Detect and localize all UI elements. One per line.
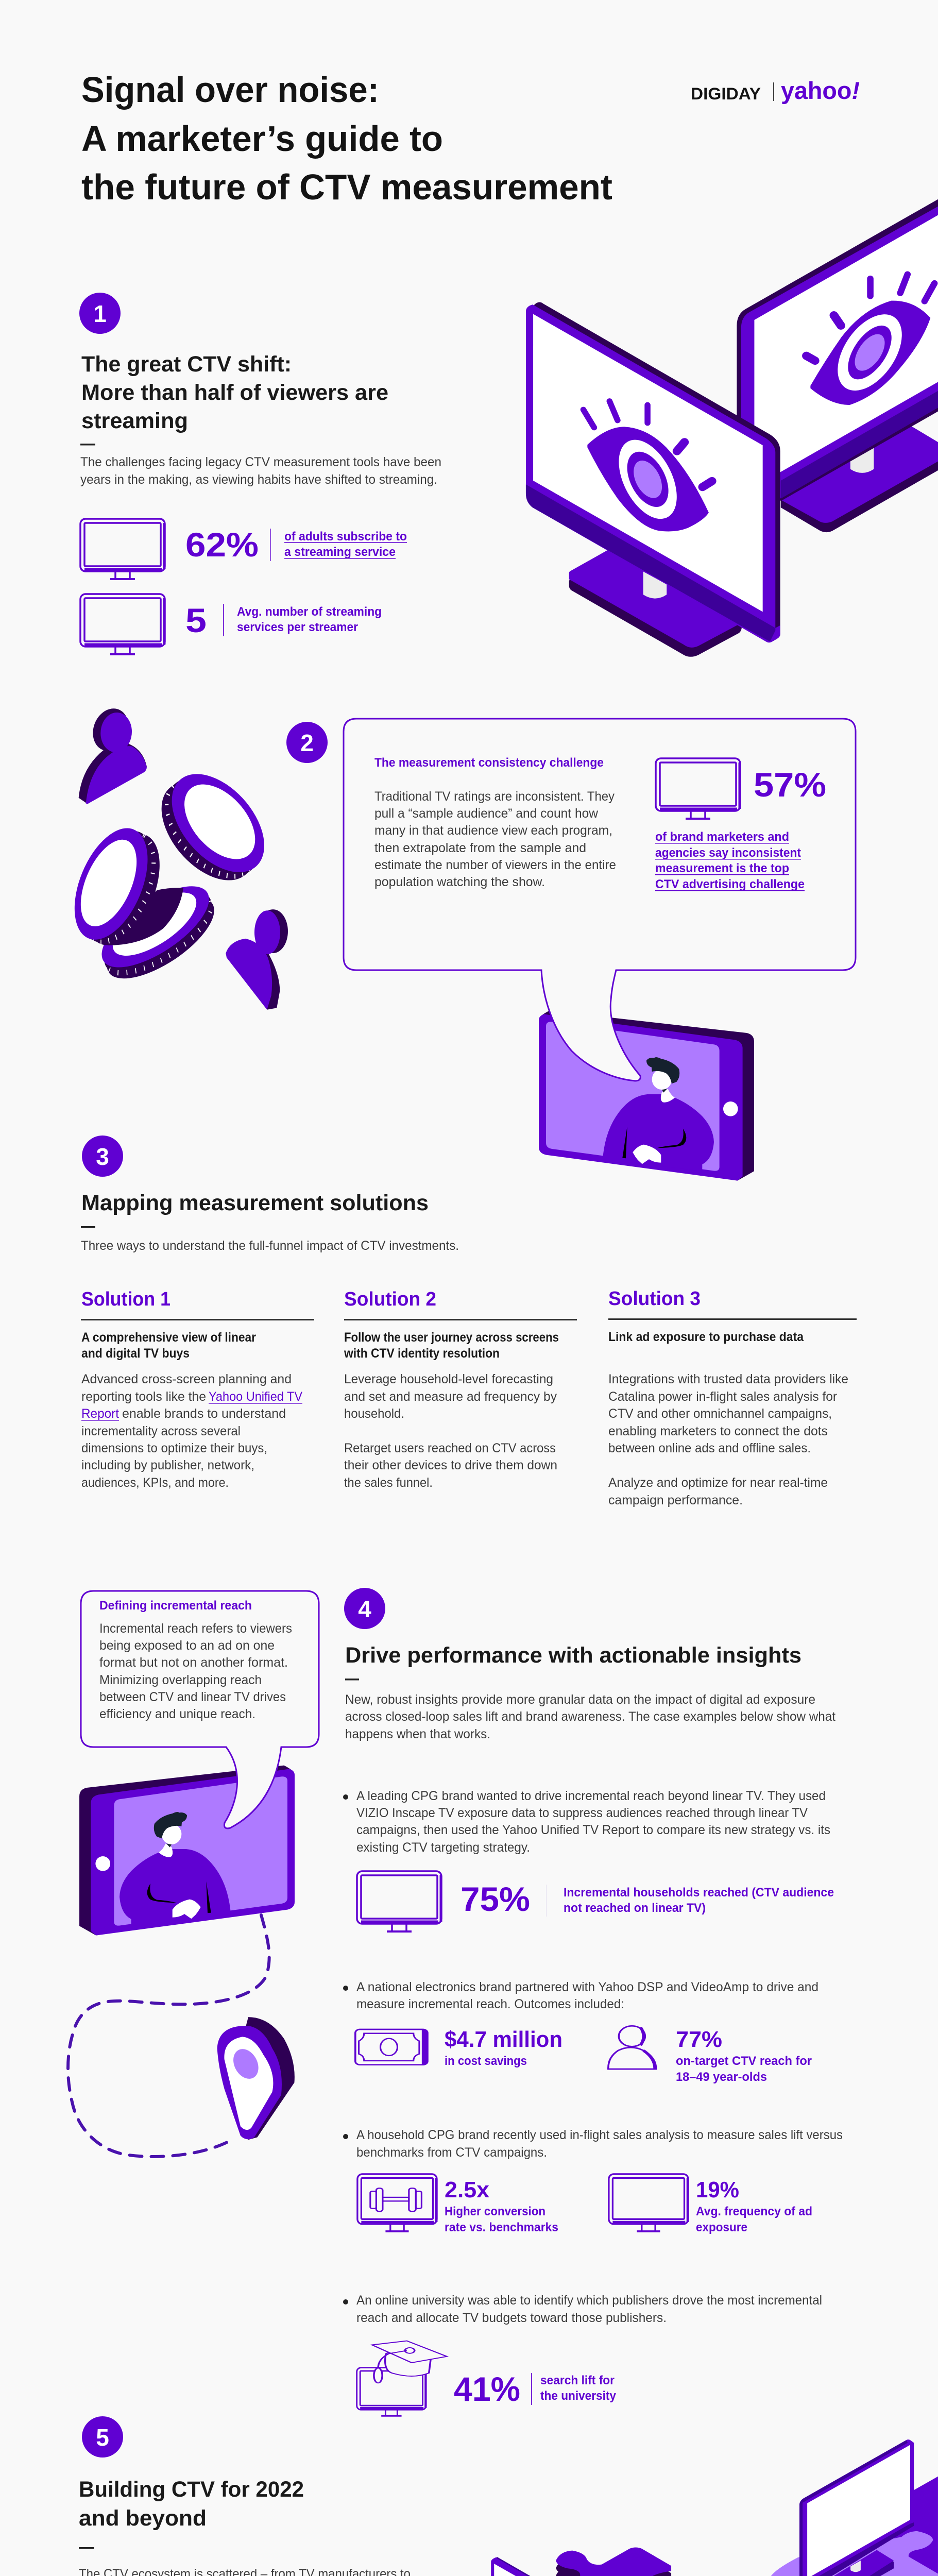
section 4 intro text: happens when that works.: [345, 1727, 490, 1741]
stat: 5 services: Avg. number of streaming: [237, 605, 382, 619]
section 1 intro text: The challenges facing legacy CTV measurement tools have been: [80, 455, 441, 469]
case example: household CPG brand: benchmarks from CTV campaigns.: [356, 2145, 547, 2160]
stat: 57 percent: of brand marketers and: [655, 830, 789, 844]
case example: electronics brand: in cost savings: [445, 2054, 527, 2068]
panel: solution 3: CTV and other omnichannel campaigns,: [608, 1406, 832, 1421]
section 3 heading: Mapping measurement solutions: [81, 1191, 429, 1215]
monitor right: [799, 2439, 914, 2576]
case example: electronics brand: [343, 1980, 818, 2084]
panel: solution 3: Link ad exposure to purchase data: [608, 1330, 804, 1344]
panel: solution 1: incrementality across several: [81, 1424, 241, 1438]
front monitor: [526, 302, 780, 657]
case example: electronics brand: on-target CTV reach for: [676, 2054, 812, 2068]
case example: online university: An online university was able to identify which publishers drove the most incremental: [356, 2293, 822, 2308]
icon: tv: [357, 1871, 441, 1931]
callout body: Traditional TV ratings are inconsistent. They: [374, 789, 615, 804]
panel: solution 2: the sales funnel.: [344, 1476, 433, 1490]
illustration: monitors with eyes: [526, 199, 938, 657]
case example: household CPG brand: 2.5x: [445, 2177, 490, 2202]
logos: Digiday and Yahoo: [691, 77, 860, 104]
section 1 intro text: years in the making, as viewing habits have shifted to streaming.: [80, 472, 437, 487]
stat: 62 percent: of adults subscribe to: [284, 530, 407, 544]
panel: measurement consistency callout: [344, 719, 856, 1081]
section 4 number badge: 4: [358, 1596, 371, 1622]
person bottom: [226, 909, 288, 1010]
case example: CPG brand: not reached on linear TV): [564, 1901, 706, 1915]
illustration: mirrored tablet with presenter: [79, 1766, 295, 1936]
stat: 57 percent: measurement is the top: [655, 861, 789, 875]
icon: tv with graduation cap: [357, 2341, 447, 2416]
panel: solution 2: Follow the user journey across screens: [344, 1330, 559, 1345]
illustration: coins and people: [60, 700, 288, 1010]
panel: solution 3: Catalina power in-flight sales analysis for: [608, 1389, 837, 1404]
stat: 5 services: 5: [185, 601, 207, 639]
stat: 62 percent: a streaming service: [284, 545, 396, 559]
section 1 heading: The great CTV shift:: [81, 352, 292, 377]
stat: 75 percent: 75%: [461, 1880, 530, 1918]
panel: defining incremental reach callout: Minimizing overlapping reach: [99, 1673, 262, 1687]
section 5 number badge: [82, 2416, 123, 2458]
panel: solution 2: their other devices to drive them down: [344, 1458, 557, 1472]
title: [81, 70, 612, 207]
icon: tv with dumbbell: [357, 2174, 437, 2231]
panel: solution 1: [81, 1289, 314, 1490]
icon: location pin: [217, 2017, 295, 2140]
panel: solution 1: including by publisher, network,: [81, 1458, 254, 1472]
section 4 intro text: New, robust insights provide more granular data on the impact of digital ad exposure: [345, 1692, 815, 1707]
icon: tv: [609, 2174, 688, 2231]
icon: tv: [80, 594, 165, 654]
section 1 number badge: [79, 293, 121, 334]
panel: solution 3: [608, 1288, 857, 1507]
panel: solution 3: Analyze and optimize for near real-time: [608, 1476, 828, 1490]
section 3 number badge: [82, 1136, 123, 1177]
case example: online university: search lift for: [540, 2374, 615, 2387]
speech bubble: [344, 719, 856, 1081]
person top: [79, 700, 147, 804]
section 4 intro text: [345, 1692, 835, 1741]
panel: defining incremental reach callout: being exposed to an ad on one: [99, 1638, 275, 1653]
section 3 heading: [81, 1191, 459, 1253]
panel: solution 2: Leverage household-level forecasting: [344, 1372, 553, 1386]
icon: banknote: [355, 2029, 428, 2065]
section 4 intro text: across closed-loop sales lift and brand awareness. The case examples below show what: [345, 1709, 835, 1724]
stat: 57 percent: CTV advertising challenge: [655, 877, 805, 891]
stat: 62 percent: 62%: [185, 526, 259, 564]
icon: tv: [656, 758, 740, 819]
panel: solution 2: Solution 2: [344, 1289, 436, 1310]
stat: 57 percent: 57%: [754, 766, 826, 804]
callout body: [374, 789, 616, 889]
title: A marketer’s guide to: [81, 118, 443, 159]
panel: defining incremental reach callout: efficiency and unique reach.: [99, 1707, 255, 1721]
section 1 heading: [80, 352, 388, 445]
section 2 number badge: 2: [300, 730, 314, 756]
illustration: tablet with presenter: [539, 1011, 754, 1181]
case example: CPG brand: Incremental households reached (CTV audience: [564, 1886, 834, 1900]
panel: solution 2: with CTV identity resolution: [344, 1346, 500, 1361]
case example: CPG brand: VIZIO Inscape TV exposure data to suppress audiences reached through linear TV: [356, 1806, 808, 1820]
panel: defining incremental reach callout: [81, 1591, 319, 1828]
section 2 number badge: [286, 722, 328, 763]
panel: solution 1: and digital TV buys: [81, 1346, 190, 1361]
stat: 62 percent: [80, 519, 407, 579]
panel: solution 3: Solution 3: [608, 1288, 701, 1310]
panel: solution 2: household.: [344, 1406, 404, 1421]
section 4 number badge: [344, 1588, 385, 1629]
panel: solution 2: Retarget users reached on CTV across: [344, 1441, 556, 1455]
case example: household CPG brand: 19%: [696, 2177, 739, 2202]
callout heading: The measurement consistency challenge: [374, 756, 604, 770]
section 3 heading: Three ways to understand the full-funnel impact of CTV investments.: [81, 1239, 459, 1253]
section 4 heading: [345, 1643, 801, 1681]
case example: online university: [343, 2293, 822, 2416]
case example: CPG brand: existing CTV targeting strategy.: [356, 1840, 530, 1855]
panel: defining incremental reach callout: between CTV and linear TV drives: [99, 1690, 286, 1704]
section 1 heading: streaming: [81, 409, 188, 433]
case example: online university: reach and allocate TV budgets toward those publishers.: [356, 2311, 667, 2325]
callout body: pull a “sample audience” and count how: [374, 806, 599, 821]
case example: electronics brand: $4.7 million: [445, 2027, 562, 2052]
case example: household CPG brand: A household CPG brand recently used in-flight sales analysis to measure sales lift versus: [356, 2128, 843, 2142]
icon: tv: [80, 519, 165, 579]
stat: 5 services: services per streamer: [237, 620, 358, 634]
panel: solution 2: [344, 1289, 577, 1490]
title: Signal over noise:: [81, 70, 379, 110]
section 1 number badge: 1: [93, 300, 107, 327]
title: the future of CTV measurement: [81, 167, 612, 207]
logos: Digiday and Yahoo: DIGIDAY: [691, 84, 761, 103]
coin top right: [148, 754, 278, 901]
case example: online university: 41%: [454, 2370, 520, 2408]
coin bottom: [94, 870, 223, 995]
section 4 heading: Drive performance with actionable insights: [345, 1643, 801, 1668]
section 5 number badge: 5: [96, 2424, 109, 2451]
panel: solution 1: enable brands to understand: [122, 1406, 286, 1421]
icon: person: [608, 2026, 656, 2069]
section 3 number badge: 3: [96, 1143, 109, 1170]
case example: electronics brand: measure incremental reach. Outcomes included:: [356, 1997, 624, 2011]
panel: defining incremental reach callout: format but not on another format.: [99, 1655, 288, 1670]
stat: 57 percent: agencies say inconsistent: [655, 846, 801, 860]
illustration: puzzle pieces and monitors: [460, 2439, 938, 2576]
monitor left: [491, 2557, 605, 2576]
section 1 intro text: [80, 455, 441, 487]
puzzle piece dark top-left: [555, 2547, 721, 2576]
panel: solution 1: dimensions to optimize their buys,: [81, 1441, 267, 1455]
section 1 heading: More than half of viewers are: [81, 380, 388, 405]
case example: household CPG brand: exposure: [696, 2221, 747, 2234]
case example: CPG brand: [343, 1789, 834, 1931]
stat: 5 services: [80, 594, 382, 654]
section 5 heading: [79, 2477, 304, 2549]
panel: solution 1: Advanced cross-screen planning and: [81, 1372, 292, 1386]
panel: defining incremental reach callout: Defining incremental reach: [99, 1599, 252, 1613]
section 5 heading: and beyond: [79, 2506, 207, 2531]
panel: solution 3: Integrations with trusted data providers like: [608, 1372, 848, 1386]
case example: household CPG brand: [343, 2128, 843, 2234]
case example: online university: the university: [540, 2389, 617, 2403]
callout body: population watching the show.: [374, 875, 545, 889]
case example: CPG brand: A leading CPG brand wanted to drive incremental reach beyond linear TV. They used: [356, 1789, 826, 1803]
case example: household CPG brand: Higher conversion: [445, 2205, 545, 2218]
callout body: many in that audience view each program,: [374, 823, 612, 838]
case example: household CPG brand: Avg. frequency of ad: [696, 2205, 812, 2218]
back monitor: [737, 199, 938, 532]
dashed route line: [68, 1915, 269, 2157]
panel: defining incremental reach callout: Incremental reach refers to viewers: [99, 1621, 292, 1636]
panel: solution 1: Yahoo Unified TV: [209, 1389, 302, 1404]
panel: solution 3: between online ads and offline sales.: [608, 1441, 811, 1455]
panel: solution 3: enabling marketers to connect the dots: [608, 1424, 828, 1438]
callout body: estimate the number of viewers in the entire: [374, 858, 616, 872]
panel: solution 3: campaign performance.: [608, 1493, 743, 1507]
panel: solution 2: and set and measure ad frequency by: [344, 1389, 557, 1404]
panel: solution 1: Solution 1: [81, 1289, 170, 1310]
case example: electronics brand: 77%: [676, 2027, 722, 2052]
panel: solution 1: audiences, KPIs, and more.: [81, 1476, 229, 1490]
case example: electronics brand: 18–49 year-olds: [676, 2070, 767, 2084]
case example: household CPG brand: rate vs. benchmarks: [445, 2221, 558, 2234]
panel: solution 1: reporting tools like the: [81, 1389, 206, 1404]
coin left: [60, 811, 175, 962]
logos: Digiday and Yahoo: yahoo!: [781, 77, 860, 104]
callout body: then extrapolate from the sample and: [374, 841, 586, 855]
case example: electronics brand: A national electronics brand partnered with Yahoo DSP and VideoAmp to drive and: [356, 1980, 818, 1994]
case example: CPG brand: campaigns, then used the Yahoo Unified TV Report to compare its new strategy vs. its: [356, 1823, 830, 1837]
speech bubble: [81, 1591, 319, 1828]
stat: 57 percent: [655, 766, 826, 891]
section 5 heading: Building CTV for 2022: [79, 2477, 304, 2502]
puzzle piece right: [770, 2477, 938, 2576]
panel: solution 1: A comprehensive view of linear: [81, 1330, 256, 1345]
panel: solution 1: Report: [81, 1406, 119, 1421]
